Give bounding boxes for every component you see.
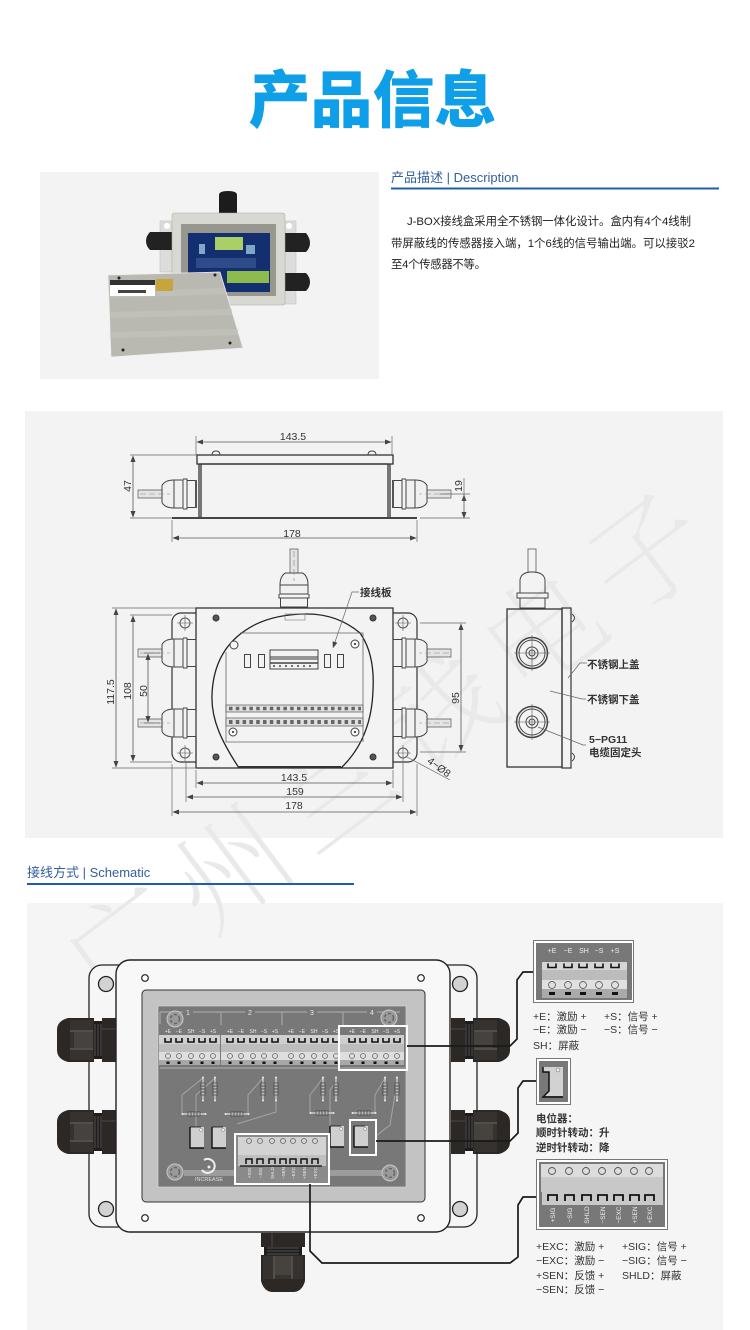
dimension 143.5: 143.5	[280, 431, 306, 443]
legend: potentiometer: 顺时针转动：升	[536, 1126, 610, 1139]
terminal block group 2: −S	[261, 1029, 268, 1035]
terminal block group 3	[282, 1029, 343, 1065]
corner screws	[213, 615, 376, 760]
signal terminal highlighted: +SEN	[302, 1167, 307, 1179]
side body	[507, 609, 562, 767]
signal terminal highlighted: SHLD	[270, 1166, 275, 1179]
group numbers: 4	[370, 1010, 374, 1017]
terminal block group 4 highlighted: −S	[383, 1029, 390, 1035]
watermark: 广州兰钱电子	[26, 447, 738, 1041]
legend: potentiometer: 逆时针转动：降	[536, 1141, 610, 1154]
icon: steel lid	[108, 272, 243, 357]
box body	[116, 960, 450, 1232]
legend: sensor terminal: +S：信号 +	[604, 1011, 658, 1023]
terminal block group 3: SH	[311, 1029, 318, 1035]
lid bolts	[212, 451, 376, 455]
connector: signal terminal	[310, 1184, 536, 1263]
detail: signal terminal	[536, 1160, 668, 1230]
legend: signal terminal: −SEN：反馈 −	[536, 1283, 604, 1296]
terminal block group 1: −S	[199, 1029, 206, 1035]
icon: increase arrow: INCREASE	[195, 1177, 223, 1183]
drawing: front view	[105, 549, 466, 816]
board screws	[229, 640, 359, 736]
label: wiring board: 接线板	[360, 586, 392, 599]
dimension 4-Ø8	[407, 755, 453, 780]
detail: signal terminal: −SEN	[600, 1206, 607, 1224]
connector: sensor terminal	[407, 972, 534, 1046]
dimension 47: 47	[122, 480, 134, 492]
icon: left cable gland	[146, 232, 172, 250]
circuit board	[158, 1006, 406, 1187]
icon: right cable gland	[285, 233, 310, 252]
signal terminal highlighted: −SIG	[258, 1167, 263, 1178]
signal terminal highlighted: −EXC	[291, 1166, 296, 1179]
dimension 50	[138, 660, 150, 716]
terminal block group 4 highlighted	[339, 1026, 407, 1070]
terminal block group 3: +E	[288, 1029, 295, 1035]
top gland	[517, 549, 548, 608]
label: cable gland	[538, 727, 642, 759]
extension lines	[112, 608, 466, 816]
drawing: side view	[507, 549, 642, 768]
legend: sensor terminal	[533, 1010, 658, 1052]
resistors	[182, 1076, 399, 1116]
dimension 143.5: 143.5	[281, 772, 307, 784]
terminal block group 2: SH	[250, 1029, 257, 1035]
gland circle upper	[516, 638, 548, 668]
legend: potentiometer: 电位器：	[536, 1112, 578, 1125]
top gland	[279, 549, 309, 607]
terminal block group 3: −S	[322, 1029, 329, 1035]
connector: potentiometer	[376, 1081, 536, 1141]
icon: blue circuit board	[188, 233, 270, 292]
left gland	[138, 479, 196, 509]
icon: top cable gland	[219, 191, 237, 214]
legend: signal terminal: +SEN：反馈 +	[536, 1269, 604, 1282]
label: cable gland: 电缆固定头	[589, 746, 642, 759]
dimension 19	[453, 478, 465, 512]
terminal block group 4 highlighted: SH	[372, 1029, 379, 1035]
text block: description: 至4个传感器不等。	[391, 257, 486, 271]
bottom edge	[239, 766, 341, 768]
legend: sensor terminal: −S：信号 −	[604, 1024, 658, 1036]
dimension 4-Ø8: 4−Ø8	[425, 755, 453, 780]
label: lower cover: 不锈钢下盖	[587, 693, 640, 706]
terminal block group 1: +E	[165, 1029, 172, 1035]
extension lines	[130, 436, 470, 542]
dimension 178: 178	[285, 800, 303, 812]
gland circle lower	[516, 706, 548, 738]
flange holes	[180, 618, 408, 758]
signal terminal highlighted: +SIG	[247, 1167, 252, 1178]
signal terminal highlighted: +EXC	[313, 1166, 318, 1179]
dimension 159: 159	[286, 786, 304, 798]
detail: signal terminal: SHLD	[584, 1206, 591, 1224]
heading: schematic: 接线方式 | Schematic	[27, 865, 151, 880]
group numbers	[183, 1008, 377, 1017]
terminal block group 4 highlighted: +S	[394, 1029, 401, 1035]
icon: increase arrow	[195, 1159, 223, 1183]
wiring board	[226, 633, 363, 742]
detail: sensor terminal	[534, 940, 634, 1002]
right gland	[393, 479, 451, 509]
dimension 95: 95	[450, 692, 462, 704]
detail: signal terminal: +SEN	[632, 1206, 639, 1224]
potentiometers	[244, 654, 344, 668]
terminal block group 3: −E	[299, 1029, 306, 1035]
label: upper cover	[568, 658, 640, 678]
detail: sensor terminal: −S	[595, 948, 604, 955]
terminal block group 2: −E	[238, 1029, 245, 1035]
detail: signal terminal: +EXC	[647, 1206, 654, 1224]
corner screws	[167, 1011, 183, 1027]
heading: description: 产品描述 | Description	[391, 170, 519, 185]
box body	[196, 608, 393, 768]
label: upper cover: 不锈钢上盖	[587, 658, 640, 671]
panel: schematic background	[27, 903, 723, 1330]
dimension 50: 50	[138, 685, 150, 697]
dimension 117.5: 117.5	[105, 679, 117, 705]
group numbers: 2	[248, 1010, 252, 1017]
legend: sensor terminal: SH：屏蔽	[533, 1040, 580, 1052]
legend: signal terminal	[536, 1240, 687, 1296]
title: 产品信息	[248, 50, 497, 140]
terminal block group 4 highlighted: +E	[349, 1029, 356, 1035]
detail: potentiometer	[536, 1058, 570, 1104]
label: cable gland: 5−PG11	[589, 734, 627, 746]
text block: description: J-BOX接线盒采用全不锈钢一体化设计。盒内有4个4线制	[407, 214, 691, 228]
legend: potentiometer	[536, 1112, 610, 1154]
icon: gold sticker	[156, 279, 173, 291]
lid bolts	[572, 614, 574, 761]
detail: sensor terminal: +E	[548, 948, 557, 955]
cutaway outline	[212, 614, 373, 768]
inner grey frame	[142, 990, 425, 1202]
bottom gland	[261, 1233, 305, 1292]
text block: description	[391, 214, 695, 271]
detail: signal terminal: −SIG	[567, 1208, 574, 1222]
side lid strip	[562, 608, 571, 768]
box lid	[197, 455, 393, 464]
dimension 95	[450, 630, 462, 745]
terminal block group 2: +E	[227, 1029, 234, 1035]
legend: sensor terminal: +E：激励 +	[533, 1010, 587, 1023]
dimension 47	[122, 462, 134, 511]
flange plate	[172, 613, 417, 762]
detail: signal terminal: +SIG	[550, 1208, 557, 1222]
legend: signal terminal: −SIG：信号 −	[622, 1255, 687, 1267]
panel: dimension drawings background	[25, 411, 723, 838]
dimension 19: 19	[453, 480, 465, 492]
traces	[160, 1012, 405, 1068]
group numbers: 1	[186, 1010, 190, 1017]
terminal block group 3: +S	[333, 1029, 340, 1035]
text block: description: 带屏蔽线的传感器接入端，1个6线的信号输出端。可以接驳2	[391, 236, 695, 250]
detail: sensor terminal: +S	[611, 948, 620, 955]
side glands	[138, 638, 196, 668]
terminal block group 1: SH	[188, 1029, 195, 1035]
group numbers: 3	[310, 1010, 314, 1017]
terminal block group 1: +S	[210, 1029, 217, 1035]
potentiometers	[190, 1126, 368, 1148]
left glands	[57, 1018, 116, 1062]
terminal block group 1	[159, 1029, 220, 1065]
drawing: top elevation	[122, 431, 470, 542]
icon: right lower cable gland	[285, 273, 310, 291]
legend: signal terminal: SHLD：屏蔽	[622, 1270, 682, 1282]
legend: signal terminal: −EXC：激励 −	[536, 1254, 604, 1267]
terminal block group 1: −E	[176, 1029, 183, 1035]
icon: open steel box	[172, 213, 285, 305]
dimension 178: 178	[283, 528, 301, 540]
label: wiring board	[335, 586, 392, 642]
legend: signal terminal: +EXC：激励 +	[536, 1240, 604, 1253]
legend: sensor terminal: −E：激励 −	[533, 1023, 587, 1036]
signal terminal highlighted	[235, 1134, 329, 1184]
box body	[201, 464, 388, 518]
detail: signal terminal: −EXC	[616, 1206, 623, 1224]
dimension 108	[122, 622, 134, 755]
detail: sensor terminal: −E	[564, 948, 573, 955]
panel: product photo	[40, 172, 379, 379]
base plate	[172, 517, 417, 519]
terminal block group 4 highlighted: −E	[360, 1029, 367, 1035]
flange holes	[98, 976, 468, 1216]
legend: signal terminal: +SIG：信号 +	[622, 1241, 687, 1253]
signal terminal highlighted: −SEN	[281, 1167, 286, 1179]
terminal block group 2: +S	[272, 1029, 279, 1035]
detail: sensor terminal: SH	[579, 948, 589, 955]
connector lines	[310, 972, 536, 1263]
terminal rows	[226, 705, 363, 726]
icon: lid label	[110, 280, 155, 296]
right glands	[451, 1018, 510, 1062]
dimension 108: 108	[122, 682, 134, 700]
centre terminal	[270, 650, 318, 669]
mounting flange	[89, 965, 477, 1227]
potentiometer highlight	[350, 1120, 376, 1155]
label: lower cover	[550, 691, 640, 706]
small holes	[142, 975, 424, 1221]
diagram: junction box	[57, 960, 510, 1292]
terminal block group 2	[221, 1029, 282, 1065]
flanges	[160, 221, 296, 304]
